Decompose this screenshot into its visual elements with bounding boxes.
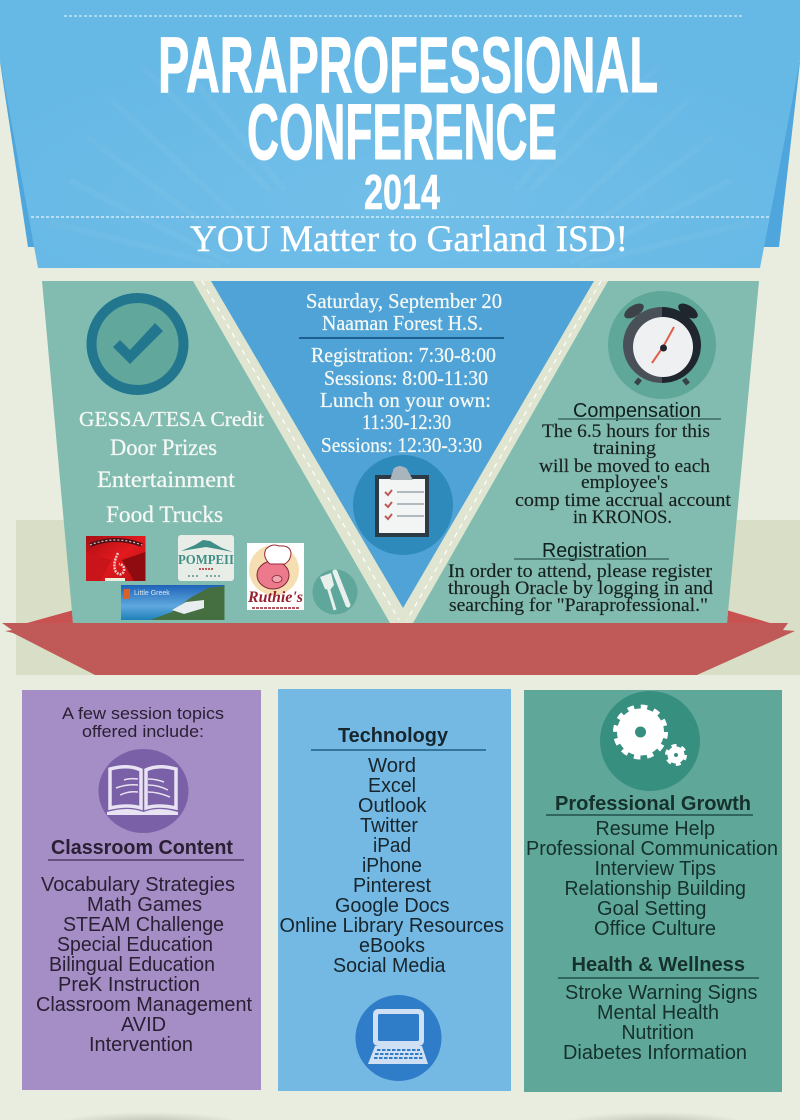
technology list: Online Library Resources xyxy=(280,914,504,937)
technology list: Social Media xyxy=(333,954,446,977)
top dashed line xyxy=(64,15,744,17)
registration text xyxy=(448,562,714,616)
logo: Ruthie's xyxy=(247,543,304,610)
benefits list: GESSA/TESA Credit xyxy=(79,407,264,431)
schedule times: Sessions: 8:00-11:30 xyxy=(324,366,488,390)
panel background xyxy=(524,690,782,1092)
compensation text: comp time accrual account xyxy=(515,491,732,511)
classroom content list: PreK Instruction xyxy=(58,973,200,996)
registration text: through Oracle by logging in and xyxy=(448,579,714,599)
panel: benefits xyxy=(42,281,390,623)
schedule times: Lunch on your own: xyxy=(320,388,491,412)
schedule times: 11:30-12:30 xyxy=(362,410,451,434)
classroom content heading: Classroom Content xyxy=(51,837,233,859)
health and wellness list xyxy=(563,981,758,1064)
health and wellness list: Stroke Warning Signs xyxy=(565,981,758,1004)
panel background xyxy=(278,689,511,1091)
health and wellness list: Mental Health xyxy=(597,1001,719,1024)
compensation text: employee's xyxy=(581,473,668,493)
classroom content list: Classroom Management xyxy=(36,993,252,1016)
classroom content list: AVID xyxy=(121,1013,166,1036)
logo: Pompeii: POMPEII xyxy=(178,553,234,568)
professional growth list: Professional Communication xyxy=(526,837,778,860)
technology list xyxy=(280,754,504,977)
compensation text: The 6.5 hours for this xyxy=(542,422,710,442)
compensation text: will be moved to each xyxy=(539,457,710,477)
stripe dashes xyxy=(202,281,601,620)
lower dashed line xyxy=(31,216,771,218)
professional growth list: Interview Tips xyxy=(594,857,716,880)
icon: laptop xyxy=(356,995,442,1081)
technology list: Google Docs xyxy=(335,894,450,917)
benefits list: Food Trucks xyxy=(106,502,223,527)
icon: fork and knife xyxy=(312,570,358,614)
logo: red food truck xyxy=(86,536,146,581)
bottom shadows xyxy=(55,1112,750,1120)
panel background xyxy=(42,281,390,623)
centre stripes xyxy=(193,281,413,623)
technology list: Pinterest xyxy=(353,874,431,897)
logo: Ruthie's: Ruthie's xyxy=(247,589,303,606)
logo: Little Greek xyxy=(121,585,224,620)
professional growth list: Goal Setting xyxy=(597,897,706,920)
classroom content list: Math Games xyxy=(87,893,202,916)
panel: growth and wellness xyxy=(524,690,782,1092)
panel background xyxy=(211,281,594,608)
icon: alarm clock xyxy=(608,291,716,399)
classroom content list: Vocabulary Strategies xyxy=(41,873,235,896)
professional growth heading: Professional Growth xyxy=(555,793,751,815)
registration text: In order to attend, please register xyxy=(448,562,712,582)
banner front xyxy=(0,0,800,268)
panel: classroom content xyxy=(22,690,261,1090)
compensation heading: Compensation xyxy=(573,400,701,422)
year: 2014 xyxy=(364,166,440,220)
technology list: iPhone xyxy=(362,854,422,877)
panel: technology xyxy=(278,689,511,1091)
intro text xyxy=(62,704,224,741)
technology list: Outlook xyxy=(358,794,427,817)
technology list: Excel xyxy=(368,774,416,797)
intro text: A few session topics xyxy=(62,704,224,723)
classroom content list: Special Education xyxy=(57,933,213,956)
technology list: Word xyxy=(368,754,416,777)
compensation text: in KRONOS. xyxy=(573,508,672,528)
compensation text: training xyxy=(593,439,656,459)
logo: Little Greek: Little Greek xyxy=(134,590,170,597)
panel: compensation and registration xyxy=(413,281,759,623)
icon: gears xyxy=(600,691,700,791)
health and wellness list: Nutrition xyxy=(622,1021,694,1044)
health and wellness list: Diabetes Information xyxy=(563,1041,747,1064)
compensation text xyxy=(515,422,732,528)
tagline: YOU Matter to Garland ISD! xyxy=(190,219,628,260)
panel background xyxy=(413,281,759,623)
logo: Pompeii xyxy=(178,535,234,581)
ribbon body xyxy=(2,623,795,675)
date and location: Naaman Forest H.S. xyxy=(322,311,483,335)
panel: schedule xyxy=(211,281,594,608)
panel background xyxy=(22,690,261,1090)
benefits list: Entertainment xyxy=(97,467,236,492)
title line 2: CONFERENCE xyxy=(247,87,557,176)
benefits list: Door Prizes xyxy=(110,435,217,460)
ribbon xyxy=(2,610,795,675)
ribbon folds xyxy=(27,610,73,623)
classroom content list xyxy=(36,873,252,1056)
schedule times: Sessions: 12:30-3:30 xyxy=(321,433,482,457)
classroom content list: Intervention xyxy=(89,1033,193,1056)
technology heading: Technology xyxy=(338,725,449,747)
date and location xyxy=(306,289,502,335)
sun rays xyxy=(50,65,750,265)
header banner xyxy=(0,0,800,268)
icon: open book xyxy=(98,749,188,833)
technology list: iPad xyxy=(373,834,411,857)
benefits list xyxy=(79,407,264,527)
technology list: Twitter xyxy=(360,814,418,837)
intro text: offered include: xyxy=(82,722,204,741)
health and wellness heading: Health & Wellness xyxy=(572,954,745,976)
professional growth list: Resume Help xyxy=(596,817,715,840)
classroom content list: STEAM Challenge xyxy=(63,913,224,936)
registration text: searching for "Paraprofessional." xyxy=(449,596,708,616)
lower background band xyxy=(16,520,800,675)
schedule times xyxy=(311,343,496,457)
technology list: eBooks xyxy=(359,934,425,957)
banner back fold xyxy=(0,62,800,247)
date and location: Saturday, September 20 xyxy=(306,289,502,313)
icon: check mark xyxy=(92,298,184,390)
professional growth list xyxy=(526,817,778,940)
icon: clipboard xyxy=(353,455,453,555)
professional growth list: Office Culture xyxy=(594,917,716,940)
professional growth list: Relationship Building xyxy=(564,877,746,900)
schedule times: Registration: 7:30-8:00 xyxy=(311,343,496,367)
registration heading: Registration xyxy=(542,540,647,562)
classroom content list: Bilingual Education xyxy=(49,953,215,976)
